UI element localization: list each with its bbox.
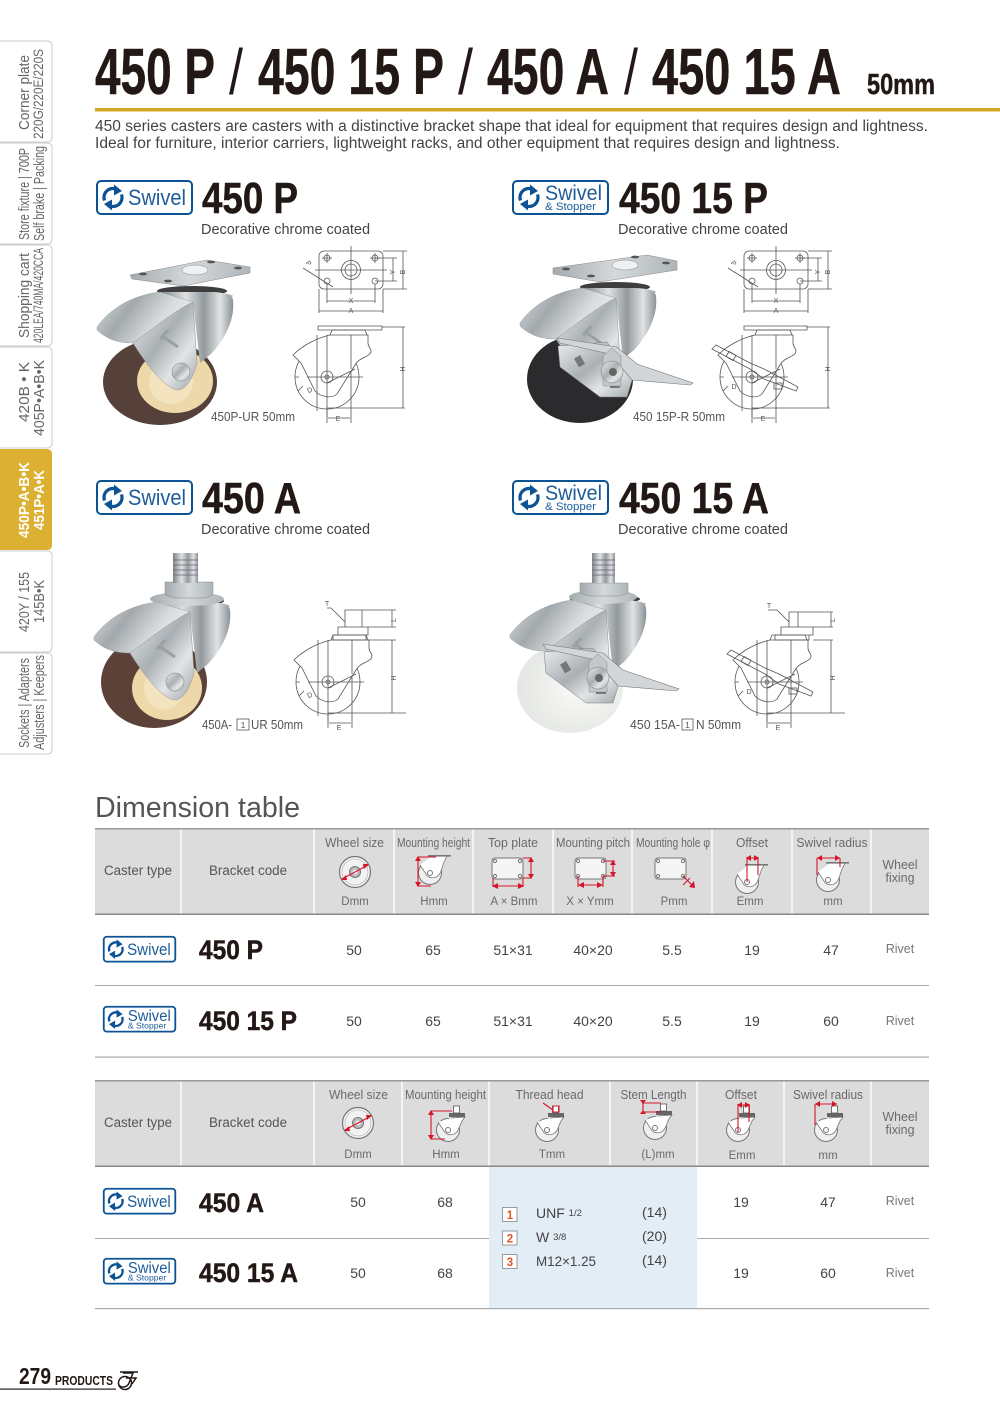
tab: 420Y: 145B•K bbox=[31, 580, 48, 623]
table 1 header: Swivel radius bbox=[796, 836, 868, 850]
finish: Decorative chrome coated bbox=[618, 521, 788, 538]
table 1 row: 450 15 P: Rivet bbox=[886, 1014, 915, 1028]
drawing: top view: B bbox=[400, 269, 407, 274]
icon: thread head bbox=[536, 1103, 564, 1142]
table 1 row: 450 P bbox=[104, 935, 915, 965]
table 2 row: 450 15 A: 50 bbox=[350, 1265, 366, 1281]
thread options: 1/2 bbox=[569, 1208, 582, 1219]
thread options: (20) bbox=[642, 1228, 667, 1244]
title: 450 15 P bbox=[258, 35, 444, 108]
icon: logo bbox=[118, 1372, 138, 1390]
heading: 450 P bbox=[202, 174, 298, 223]
icon: wheel size bbox=[340, 856, 370, 888]
title bbox=[95, 35, 935, 108]
icon: swivel radius bbox=[814, 1101, 843, 1142]
caster photo bbox=[510, 553, 679, 733]
table 2 row: 450 A: Rivet bbox=[886, 1194, 915, 1208]
table 2 row: 450 15 A: 60 bbox=[820, 1265, 836, 1281]
badge: swivel and stopper: & Stopper bbox=[545, 501, 596, 513]
table 2 header: mm bbox=[818, 1150, 838, 1162]
table 1 row: 450 15 P: 40×20 bbox=[573, 1013, 613, 1029]
table 1 row: 450 P: 65 bbox=[425, 942, 441, 958]
table 2 row: 450 A: 50 bbox=[350, 1194, 366, 1210]
tab: 420Y: 420Y / 155 bbox=[16, 572, 33, 632]
badge: swivel bbox=[97, 481, 192, 514]
drawing: top view: Y bbox=[815, 269, 822, 274]
icon: stem length bbox=[640, 1100, 672, 1140]
thread options bbox=[502, 1204, 667, 1269]
title: 450 15 A bbox=[652, 35, 841, 108]
table 2 row: 450 15 A: 19 bbox=[733, 1265, 749, 1281]
drawing: side view: E bbox=[337, 725, 342, 732]
footer: 279 bbox=[19, 1363, 51, 1389]
table 1 header: Pmm bbox=[661, 896, 687, 908]
tab: shopping cart bbox=[0, 245, 52, 346]
icon: offset bbox=[736, 855, 768, 894]
table 2 header: Caster type bbox=[104, 1115, 172, 1130]
icon: top plate bbox=[492, 857, 534, 889]
table 1 header: mm bbox=[823, 896, 843, 908]
heading: 450 15 A bbox=[619, 474, 769, 523]
badge: swivel and stopper: Swivel bbox=[545, 482, 602, 505]
tab: corner plate: 220G/220E/220S bbox=[30, 49, 46, 139]
badge: swivel and stopper: Swivel bbox=[128, 1008, 171, 1025]
caption: 1 bbox=[241, 720, 246, 730]
table 2 row: 450 15 A: 68 bbox=[437, 1265, 453, 1281]
title: / bbox=[624, 36, 638, 108]
drawing: side view: D bbox=[731, 384, 737, 391]
sidebar tabs bbox=[0, 41, 52, 754]
badge: swivel bbox=[97, 181, 192, 214]
table 2 row: 450 A: 68 bbox=[437, 1194, 453, 1210]
badge: swivel and stopper: & Stopper bbox=[545, 201, 596, 213]
badge: swivel and stopper bbox=[104, 1007, 175, 1032]
badge: swivel bbox=[104, 937, 175, 962]
table 1 row: 450 15 P: 50 bbox=[346, 1013, 362, 1029]
thread panel background bbox=[489, 1167, 697, 1308]
badge: swivel: Swivel bbox=[128, 185, 186, 210]
drawing: top view: A bbox=[349, 308, 354, 315]
table 1 row: 450 P: 51×31 bbox=[493, 942, 533, 958]
heading: 450 A bbox=[202, 474, 301, 523]
drawing: top view bbox=[728, 246, 832, 315]
table 2 header: Tmm bbox=[539, 1149, 565, 1161]
footer: PRODUCTS bbox=[55, 1373, 113, 1388]
icon: wheel size bbox=[342, 1108, 374, 1138]
drawing: top view: X bbox=[349, 298, 354, 305]
table 1 header: Mounting hole φ bbox=[636, 836, 710, 850]
thread options: 2 bbox=[507, 1234, 513, 1246]
drawing: side view: E bbox=[776, 725, 781, 732]
caster photo bbox=[94, 553, 230, 728]
tab: sockets: Adjusters | Keepers bbox=[31, 655, 48, 750]
badge: swivel: Swivel bbox=[127, 1192, 171, 1211]
tab: 450P active: 451P•A•K bbox=[31, 470, 48, 530]
drawing: side view: H bbox=[825, 366, 832, 372]
table 1 row: 450 P: 50 bbox=[346, 942, 362, 958]
tab: 420B bbox=[0, 347, 52, 448]
tab: corner plate: Corner plate bbox=[16, 55, 33, 130]
tab: sockets: Sockets | Adapters bbox=[16, 658, 33, 748]
table 2 header bbox=[95, 1080, 929, 1167]
drawing: side view bbox=[293, 326, 407, 423]
table 2 bbox=[95, 1080, 929, 1309]
table 2 row: 450 A: 19 bbox=[733, 1194, 749, 1210]
tab: 420B: 420B • K bbox=[16, 362, 33, 422]
product: 450 P bbox=[97, 174, 407, 425]
tab: store fixture: Store fixture | 700P bbox=[16, 148, 33, 240]
drawing: side view: D bbox=[746, 689, 752, 696]
table 1 header: Hmm bbox=[420, 896, 448, 908]
table 1 row: 450 P: 40×20 bbox=[573, 942, 613, 958]
drawing: side view: L bbox=[391, 618, 398, 622]
drawing: top view: Y bbox=[390, 269, 397, 274]
table 2 row: 450 15 A bbox=[104, 1258, 915, 1288]
drawing: top view: X bbox=[774, 298, 779, 305]
table 2 header: Emm bbox=[729, 1150, 755, 1162]
table 2 header: Mounting height bbox=[405, 1088, 486, 1102]
table 1 header: Dmm bbox=[341, 896, 369, 908]
title: 450 A bbox=[487, 35, 609, 108]
description: Ideal for furniture, interior carriers, lightweight racks, and other equipment that requires design and lightness. bbox=[95, 135, 840, 152]
tab: sockets bbox=[0, 653, 52, 754]
thread options: 1 bbox=[507, 1210, 514, 1222]
description bbox=[95, 118, 928, 152]
table 2 row: 450 15 A: Rivet bbox=[886, 1266, 915, 1280]
table 2 row: 450 A: 450 A bbox=[199, 1188, 264, 1218]
table 2 header: Offset bbox=[725, 1088, 758, 1102]
heading: 450 15 P bbox=[619, 174, 768, 223]
table 2 row: 450 A: 47 bbox=[820, 1194, 836, 1210]
table 1 bbox=[95, 828, 929, 1058]
thread options: (14) bbox=[642, 1204, 667, 1220]
table 2 row: 450 A bbox=[104, 1188, 915, 1218]
finish: Decorative chrome coated bbox=[618, 221, 788, 238]
title: 450 P bbox=[95, 35, 215, 108]
table 1 header: Emm bbox=[737, 896, 763, 908]
table 2 row: 450 15 A: 450 15 A bbox=[199, 1258, 298, 1288]
drawing: side view: T bbox=[767, 603, 772, 610]
drawing: top view: P bbox=[729, 260, 737, 268]
thread options: M12×1.25 bbox=[536, 1253, 596, 1269]
table 1 row: 450 15 P: 5.5 bbox=[662, 1013, 682, 1029]
drawing: side view bbox=[727, 603, 845, 732]
caption: 450A- bbox=[202, 718, 232, 732]
table 2 header: Bracket code bbox=[209, 1115, 287, 1130]
table 1 header: A × Bmm bbox=[491, 896, 537, 908]
tab: store fixture: Self brake | Packing bbox=[31, 146, 48, 241]
table 1 row: 450 P: 5.5 bbox=[662, 942, 682, 958]
table 1 row: 450 15 P bbox=[104, 1006, 915, 1036]
drawing: side view bbox=[712, 326, 832, 423]
table 1 row: 450 P: 47 bbox=[823, 942, 839, 958]
caption: 450 15P-R 50mm bbox=[633, 410, 725, 424]
tab: 450P active: 450P•A•B•K bbox=[16, 462, 33, 538]
tab: 450P active bbox=[0, 449, 52, 550]
table 1 row: 450 P: 450 P bbox=[199, 935, 263, 965]
caption: N 50mm bbox=[696, 718, 741, 732]
table 1 header bbox=[95, 828, 929, 915]
badge: swivel and stopper: & Stopper bbox=[128, 1274, 167, 1283]
thread options: (14) bbox=[642, 1252, 667, 1268]
caption bbox=[630, 718, 741, 732]
drawing: side view bbox=[294, 601, 406, 732]
table 1 header: fixing bbox=[886, 871, 915, 885]
caption: 1 bbox=[685, 720, 690, 730]
table 1 row: 450 15 P: 51×31 bbox=[493, 1013, 533, 1029]
tab: shopping cart: Shopping cart bbox=[16, 252, 33, 338]
drawing: side view: H bbox=[400, 366, 407, 372]
caption: 450 15A- bbox=[630, 718, 680, 732]
drawing: top view: A bbox=[774, 308, 779, 315]
drawing: top view: P bbox=[304, 260, 312, 268]
tab: corner plate bbox=[0, 41, 52, 142]
title: / bbox=[458, 36, 473, 108]
table 1 header: Wheel size bbox=[325, 836, 384, 850]
badge: swivel: Swivel bbox=[127, 940, 171, 959]
section heading: Dimension table bbox=[95, 792, 300, 824]
table 2 header: Wheel size bbox=[329, 1088, 388, 1102]
table 1 header: Bracket code bbox=[209, 863, 287, 878]
icon: mounting height bbox=[415, 855, 451, 887]
icon: offset bbox=[726, 1102, 755, 1142]
tab: 420B: 405P•A•B•K bbox=[31, 360, 48, 436]
icon: swivel radius bbox=[816, 855, 849, 892]
finish: Decorative chrome coated bbox=[201, 221, 370, 238]
tab: 420Y bbox=[0, 551, 52, 652]
table 1 header: Top plate bbox=[488, 836, 538, 850]
product: 450 15 A bbox=[510, 474, 845, 733]
table 1 row: 450 15 P: 65 bbox=[425, 1013, 441, 1029]
caption bbox=[202, 718, 303, 732]
title: / bbox=[229, 36, 243, 108]
caster photo bbox=[520, 255, 693, 423]
thread options: 3 bbox=[507, 1257, 513, 1269]
table 1 header: Mounting pitch bbox=[556, 836, 630, 850]
product: 450 A bbox=[94, 474, 406, 732]
description: 450 series casters are casters with a distinctive bracket shape that ideal for equipment that requires design and lightness. bbox=[95, 118, 928, 135]
drawing: side view: H bbox=[830, 675, 837, 681]
drawing: side view: L bbox=[830, 618, 837, 622]
badge: swivel bbox=[104, 1189, 175, 1214]
caption: 450P-UR 50mm bbox=[211, 410, 295, 424]
drawing: side view: D bbox=[306, 386, 314, 395]
thread options: 3/8 bbox=[553, 1232, 566, 1243]
table 1 row: 450 15 P: 19 bbox=[744, 1013, 760, 1029]
tab: shopping cart: 420LEA/740MA/420CCA bbox=[30, 248, 46, 343]
drawing: side view: T bbox=[325, 601, 330, 608]
icon: mounting hole bbox=[655, 858, 695, 888]
table 2 header: Wheel bbox=[882, 1110, 918, 1124]
badge: swivel and stopper: Swivel bbox=[128, 1260, 171, 1277]
badge: swivel and stopper: Swivel bbox=[545, 182, 602, 205]
badge: swivel: Swivel bbox=[128, 485, 186, 510]
table 2 header: fixing bbox=[886, 1123, 915, 1137]
caption: UR 50mm bbox=[251, 718, 303, 732]
tab: store fixture bbox=[0, 143, 52, 244]
product: 450 15 P bbox=[513, 174, 832, 424]
thread options: UNF bbox=[536, 1205, 565, 1221]
table 2 header: Thread head bbox=[516, 1088, 584, 1102]
badge: swivel and stopper bbox=[513, 481, 608, 514]
thread options: W bbox=[536, 1229, 549, 1245]
drawing: side view: D bbox=[306, 691, 314, 700]
table 2 header: (L)mm bbox=[641, 1149, 675, 1161]
badge: swivel and stopper bbox=[104, 1259, 175, 1284]
drawing: top view: B bbox=[825, 269, 832, 274]
table 2 header: Swivel radius bbox=[793, 1088, 863, 1102]
finish: Decorative chrome coated bbox=[201, 521, 370, 538]
table 1 row: 450 15 P: 60 bbox=[823, 1013, 839, 1029]
drawing: top view bbox=[303, 246, 407, 315]
footer bbox=[0, 1363, 138, 1390]
drawing: side view: E bbox=[336, 416, 341, 423]
table 1 header: Wheel bbox=[882, 858, 918, 872]
table 1 header: Offset bbox=[736, 836, 769, 850]
table 1 header: Mounting height bbox=[397, 836, 470, 850]
drawing: side view: H bbox=[391, 675, 398, 681]
icon: mounting height bbox=[428, 1106, 465, 1142]
badge: swivel and stopper bbox=[513, 181, 608, 214]
caster photo bbox=[97, 260, 250, 425]
table 1 header: Caster type bbox=[104, 863, 172, 878]
table 1 header: X × Ymm bbox=[566, 896, 614, 908]
drawing: side view: E bbox=[761, 416, 766, 423]
table 1 row: 450 15 P: 450 15 P bbox=[199, 1006, 297, 1036]
table 1 row: 450 P: Rivet bbox=[886, 942, 915, 956]
badge: swivel and stopper: & Stopper bbox=[128, 1022, 167, 1031]
table 2 header: Stem Length bbox=[620, 1088, 687, 1102]
table 2 header: Dmm bbox=[344, 1149, 372, 1161]
title: 50mm bbox=[867, 69, 935, 101]
table 1 row: 450 P: 19 bbox=[744, 942, 760, 958]
table 2 header: Hmm bbox=[432, 1149, 460, 1161]
icon: mounting pitch bbox=[575, 858, 616, 888]
